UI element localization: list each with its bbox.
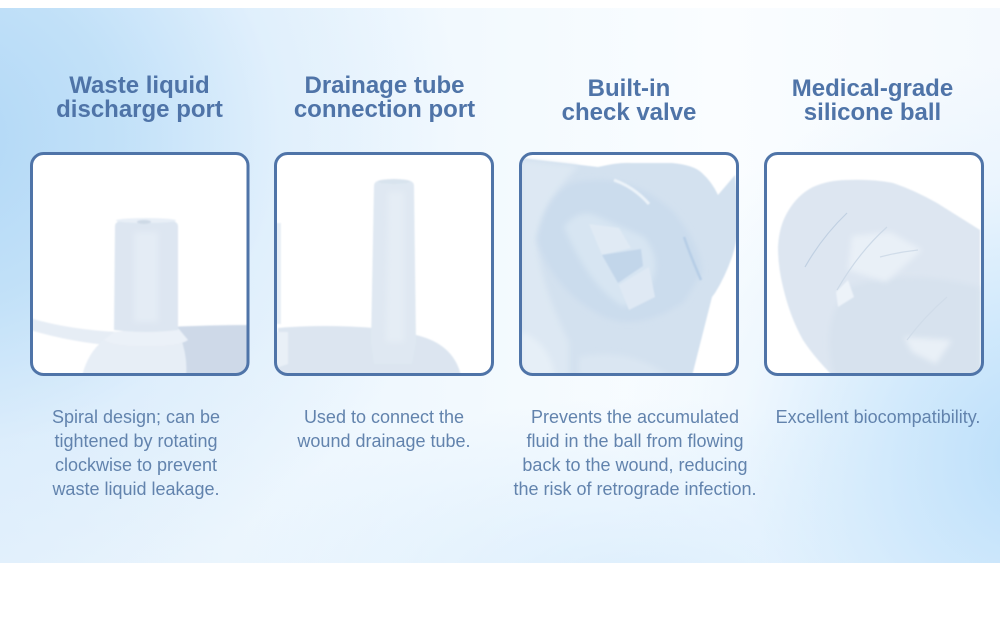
heading: waste liquid discharge port [56,72,223,123]
text: drainage tube port description: Used to connect the [304,407,464,427]
text: check valve description: fluid in the ball from flowing [526,431,744,451]
text: silicone ball description: Excellent biocompatibility. [776,407,980,427]
text: waste liquid port description: tightened by rotating [54,431,218,451]
panel: medical-grade silicone ball photo [764,152,984,376]
heading: drainage tube connection port [294,72,475,123]
heading: drainage tube connection port: connection port [294,96,475,123]
heading: waste liquid discharge port: discharge port [56,96,223,123]
heading: medical-grade silicone ball [792,75,953,126]
heading: medical-grade silicone ball: Medical-grade [792,75,953,102]
panel: drainage tube connection port photo [274,152,494,376]
text: drainage tube port description [297,407,471,451]
text: waste liquid port description [52,407,220,499]
heading: waste liquid discharge port: Waste liquid [69,72,210,99]
heading: drainage tube connection port: Drainage tube [304,72,465,99]
heading: built-in check valve [562,75,696,126]
heading: medical-grade silicone ball: silicone ball [804,99,941,126]
text: waste liquid port description: waste liquid leakage. [52,479,220,499]
heading: built-in check valve: Built-in [588,75,670,102]
text: check valve description [513,407,757,499]
text: check valve description: back to the wound, reducing [522,455,748,475]
text: check valve description: the risk of retrograde infection. [513,479,757,499]
text: drainage tube port description: wound drainage tube. [297,431,471,451]
panel: built-in check valve photo [519,152,739,376]
heading: built-in check valve: check valve [562,99,696,126]
text: check valve description: Prevents the accumulated [531,407,739,427]
text: waste liquid port description: clockwise to prevent [55,455,217,475]
panel: waste liquid discharge port photo [30,152,250,376]
text: waste liquid port description: Spiral design; can be [52,407,220,427]
